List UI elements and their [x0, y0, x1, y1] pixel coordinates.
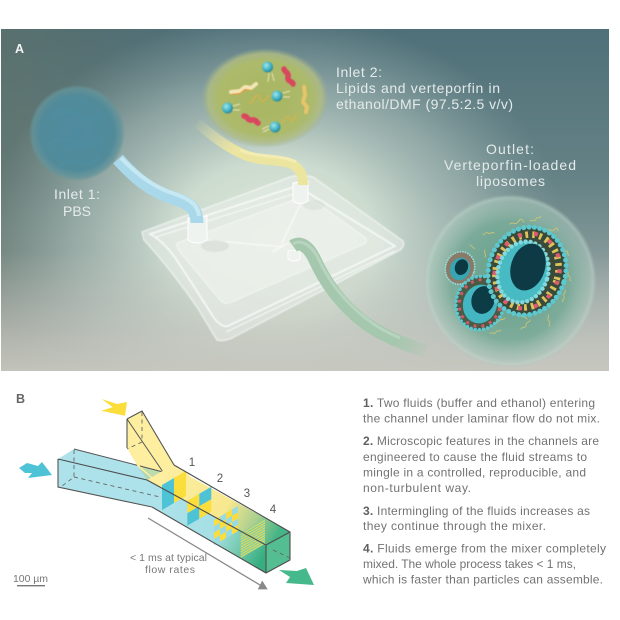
step 2 text	[363, 434, 599, 495]
inlet 2 label: Lipids and verteporfin in	[336, 80, 500, 96]
outlet connector	[288, 250, 300, 261]
mixing zone 1	[162, 471, 186, 510]
microfluidic chip	[142, 176, 404, 341]
arrow: flow direction	[148, 518, 267, 589]
step 4 text: which is faster than particles can assemble.	[362, 572, 603, 586]
mixing zone 4	[241, 519, 265, 558]
inlet 2 label	[336, 64, 513, 112]
step 1 text: the channel under laminar flow do not mix.	[363, 412, 600, 426]
step numbers	[189, 457, 277, 516]
chip inner rim	[150, 186, 395, 326]
arrow: green outflow	[279, 568, 314, 585]
inlet 2 label: ethanol/DMF (97.5:2.5 v/v)	[336, 96, 513, 112]
hidden channel edges	[62, 412, 290, 558]
medium liposome	[454, 274, 504, 332]
flow time label	[130, 552, 207, 576]
large liposome	[486, 224, 568, 318]
outlet label: Verteporfin-loaded	[444, 157, 576, 173]
step 4 text: mixed. The whole process takes < 1 ms,	[363, 557, 576, 571]
main mixing channel	[58, 459, 290, 573]
step 3 text	[363, 504, 590, 533]
step 4 text	[362, 542, 606, 586]
flow time label: flow rates	[145, 564, 195, 576]
small liposome	[444, 250, 476, 286]
inlet 1 label: Inlet 1:	[54, 186, 100, 202]
outlet label: liposomes	[476, 173, 545, 189]
step 2 text: 2. Microscopic features in the channels are	[363, 434, 599, 448]
yellow inlet channel	[127, 411, 190, 500]
panel A: microfluidic chip illustration	[1, 29, 609, 371]
panel A background	[1, 29, 609, 371]
step 4 text: 4. Fluids emerge from the mixer completely	[363, 542, 606, 556]
inlet 1 sphere: PBS	[29, 85, 125, 181]
outlet label: Outlet:	[486, 141, 534, 157]
blue inlet tube	[118, 158, 199, 223]
step 3 text: 3. Intermingling of the fluids increases as	[363, 504, 590, 518]
inlet 2 label: Inlet 2:	[336, 64, 382, 80]
panel B: micromixer channel diagram	[13, 399, 314, 589]
mixing zone 2	[187, 487, 211, 526]
microchannels	[207, 205, 300, 252]
lipid molecules	[222, 62, 307, 132]
mixing zone 3	[214, 506, 238, 545]
flow time label: < 1 ms at typical	[130, 552, 207, 564]
outlet sphere: verteporfin-loaded liposomes	[423, 194, 597, 368]
inlet 1 label	[55, 189, 99, 216]
step numbers: 1	[189, 457, 195, 469]
outlet label	[444, 141, 576, 189]
connector shadows	[201, 240, 229, 252]
green outlet tube	[293, 242, 426, 351]
yellow inlet connector	[293, 181, 308, 204]
step 1 text: 1. Two fluids (buffer and ethanol) entering	[363, 396, 595, 410]
channel outlines	[58, 459, 290, 573]
inlet 1 label: PBS	[63, 203, 91, 219]
PEG chains around liposomes	[463, 216, 571, 333]
blue inlet connector	[188, 216, 207, 243]
arrow: yellow inflow	[101, 399, 127, 416]
step 1 text	[363, 396, 600, 426]
step numbers: 2	[217, 473, 223, 485]
yellow inlet tube	[197, 123, 303, 185]
scale bar: 100 µm	[13, 573, 48, 585]
blue inlet channel	[58, 449, 182, 507]
chip inner plate	[177, 200, 367, 304]
step 2 text: mingle in a controlled, reproducible, and	[363, 466, 586, 480]
label A: A	[15, 42, 24, 56]
chip base	[142, 176, 404, 341]
step numbers: 3	[244, 488, 250, 500]
label B: B	[16, 392, 25, 406]
step 3 text: they continue through the mixer.	[363, 519, 546, 533]
explanatory text	[362, 396, 606, 586]
step numbers: 4	[270, 504, 277, 516]
arrow: blue inflow	[19, 462, 52, 478]
step 2 text: engineered to cause the fluid streams to	[363, 450, 587, 464]
step 2 text: non-turbulent way.	[363, 481, 471, 495]
inlet 2 sphere: lipids and verteporfin	[201, 48, 329, 148]
